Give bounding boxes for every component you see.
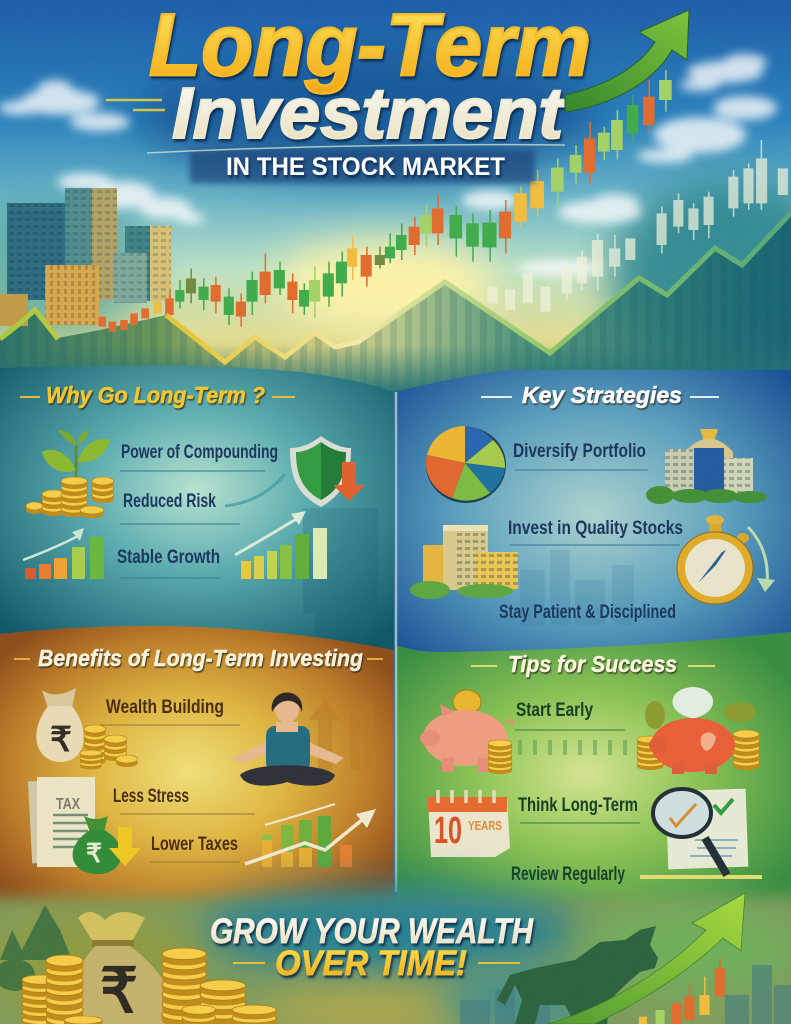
label: Less Stress [113,786,189,807]
growth arrow top [565,10,689,112]
clouds [0,54,777,276]
icon: money bag with coins: ₹ [50,721,72,759]
label: Reduced Risk [123,491,216,512]
white and pale candlesticks right [487,140,788,312]
icon: plant on coins [26,430,114,518]
trees [0,905,72,991]
faint skyline [520,550,634,625]
faint building background [303,508,378,645]
central divider [395,392,397,892]
header scene background [0,0,791,395]
icon: shield with down arrow [225,436,365,507]
label: Start Early [516,700,593,721]
icon: large rupee money bag: ₹ [100,957,138,1024]
icon: orange piggy bank with speech bubble [637,687,759,774]
calendar caption: YEARS [468,818,502,833]
label: Invest in Quality Stocks [508,518,683,539]
icon: tax document [28,777,95,867]
icon: money bag with coins [36,688,138,770]
rule above subtitle [147,145,565,153]
heading: Benefits of Long-Term Investing [38,645,363,671]
skyline area below line [0,213,791,395]
icon: quality stock building [410,525,518,599]
label: Think Long-Term [518,795,638,816]
icon: bull silhouette [497,926,658,1024]
subtitle: IN THE STOCK MARKET [226,153,505,181]
main title [106,0,591,183]
icon: growth chart with arrow [245,804,376,867]
panel: tips for success [396,632,791,915]
banner background [0,888,791,1024]
heading: Key Strategies [522,382,682,408]
icon: calendar 10 years [428,790,510,857]
faint arrows behind figure [308,700,374,772]
icon: pie chart [426,426,506,503]
label: Stay Patient & Disciplined [499,602,676,623]
city buildings [0,188,171,326]
subtitle banner [190,150,535,183]
bar chart right [235,511,327,579]
icon: pink piggy bank with coin [420,690,512,774]
heading: Why Go Long-Term ? [46,382,265,408]
icon: stopwatch [677,515,775,604]
label: Wealth Building [106,697,224,718]
tagline: over time: OVER TIME! [275,944,467,983]
panel: key strategies [396,370,791,670]
bar chart left [23,528,104,579]
zigzag trend line [0,213,791,362]
panel: why go long-term [0,366,394,660]
label: Diversify Portfolio [513,441,646,462]
icon: green rupee bag with down arrow: ₹ [86,838,102,868]
icon: large rupee money bag [71,912,180,1024]
panel: benefits of long-term investing [0,626,394,915]
calendar number: 10 [434,810,462,852]
label: Power of Compounding [121,442,278,463]
panel: bottom banner [0,888,791,1024]
candlesticks lower right [639,958,725,1024]
icon: magnifier over checklist [653,789,748,875]
icon: domed office building [646,429,767,504]
icon: coin stacks [22,948,276,1024]
skyline [460,965,791,1024]
colored candlesticks chart [98,70,672,332]
label: Review Regularly [511,864,625,885]
heading: Tips for Success [508,651,677,677]
large growth arrow [548,893,745,1024]
label: Lower Taxes [151,834,238,855]
icon: meditating person [232,692,344,786]
faint fence [520,740,625,755]
tagline: grow your wealth: GROW YOUR WEALTH [210,912,534,951]
speed marks [106,100,165,110]
icon: tax document: TAX [56,796,80,813]
label: Stable Growth [117,547,220,568]
icon: green rupee bag with down arrow [73,816,141,874]
title line: Investment: Investment [172,74,566,154]
